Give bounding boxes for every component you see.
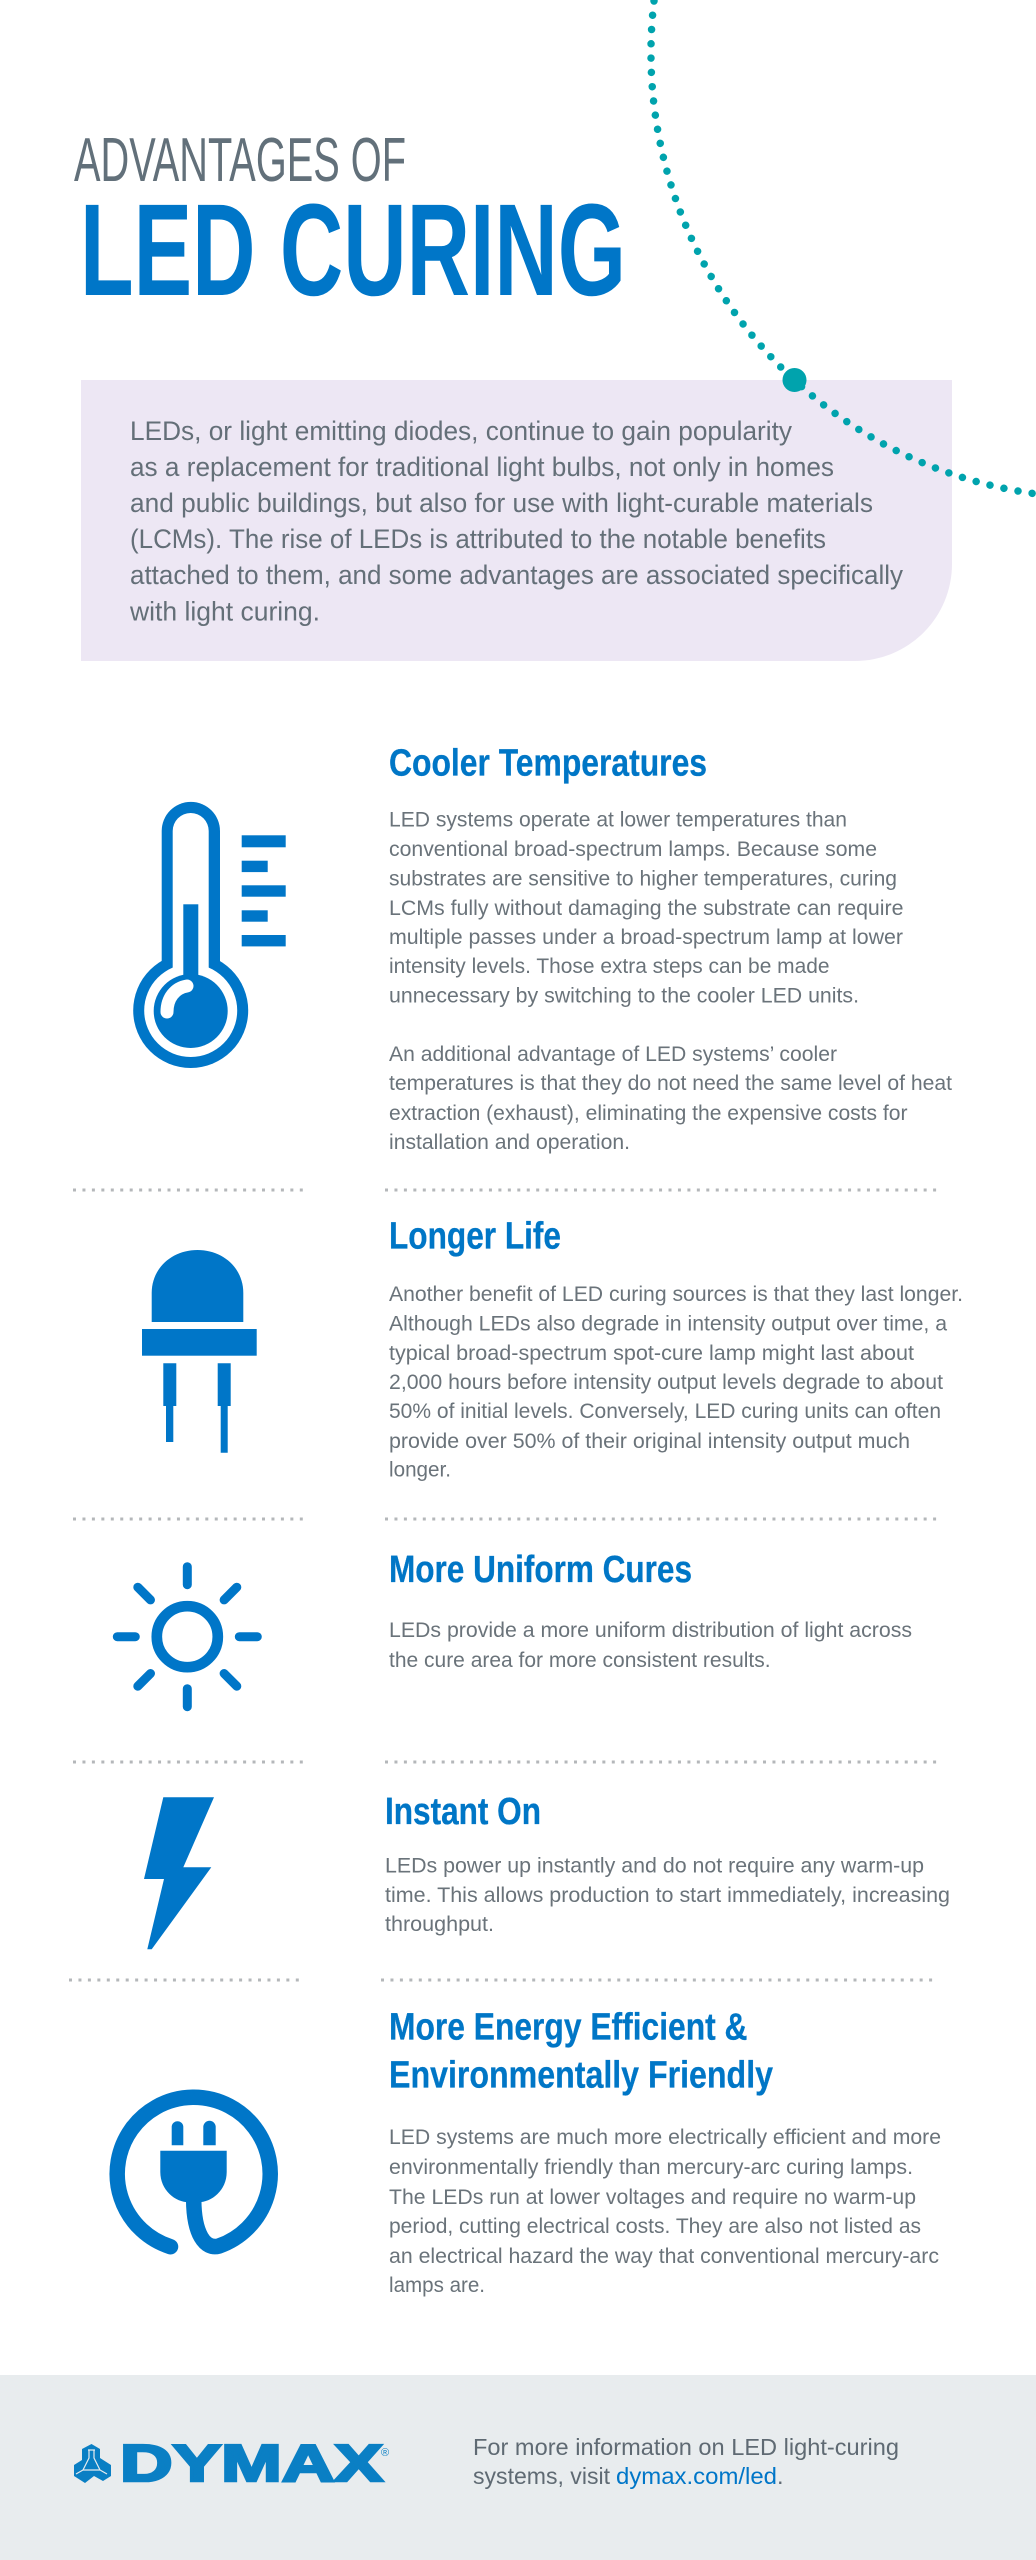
registered mark: ® [381, 2447, 389, 2459]
icon: power plug [117, 2097, 270, 2247]
body: cooler temperatures: extraction (exhaust), eliminating the expensive costs for [389, 1101, 908, 1125]
body: instant on [385, 1854, 950, 1936]
intro text: and public buildings, but also for use with light-curable materials [130, 488, 873, 518]
body: cooler temperatures: conventional broad-spectrum lamps. Because some [389, 837, 877, 861]
body: energy efficient: The LEDs run at lower voltages and require no warm-up [389, 2185, 916, 2209]
icon: lightning bolt [144, 1797, 214, 1949]
body: longer life: typical broad-spectrum spot-cure lamp might last about [389, 1341, 914, 1365]
body: cooler temperatures: LCMs fully without damaging the substrate can require [389, 896, 904, 920]
intro text: LEDs, or light emitting diodes, continue to gain popularity [130, 416, 793, 446]
heading: longer life: Longer Life [389, 1216, 561, 1258]
title line: advantages of: ADVANTAGES OF [74, 125, 406, 195]
heading: instant on: Instant On [385, 1791, 541, 1833]
title [74, 125, 626, 323]
body: longer life: provide over 50% of their original intensity output much [389, 1429, 910, 1453]
body: instant on: throughput. [385, 1912, 494, 1936]
body: cooler temperatures: unnecessary by switching to the cooler LED units. [389, 984, 859, 1008]
body: cooler temperatures: An additional advantage of LED systems’ cooler [389, 1042, 837, 1066]
footer text [473, 2434, 899, 2489]
section: energy efficient [389, 2006, 941, 2297]
wordmark: dymax: DYMAX [120, 2435, 383, 2493]
body: more uniform cures: LEDs provide a more uniform distribution of light across [389, 1618, 912, 1642]
footer band [0, 2375, 1036, 2560]
body: longer life: 2,000 hours before intensity output levels degrade to about [389, 1370, 943, 1394]
intro text: as a replacement for traditional light bulbs, not only in homes [130, 452, 834, 482]
body: energy efficient [389, 2125, 941, 2297]
body: longer life: Although LEDs also degrade in intensity output over time, a [389, 1312, 947, 1336]
body: cooler temperatures: LED systems operate at lower temperatures than [389, 808, 847, 832]
icon: led diode [142, 1250, 257, 1453]
footer text: dymax.com/led [616, 2463, 777, 2489]
body: cooler temperatures: multiple passes under a broad-spectrum lamp at lower [389, 925, 903, 949]
heading: more uniform cures: More Uniform Cures [389, 1549, 692, 1591]
body: cooler temperatures: intensity levels. Those extra steps can be made [389, 954, 830, 978]
heading: energy efficient: Environmentally Friendly [389, 2054, 773, 2096]
body: cooler temperatures: installation and operation. [389, 1130, 630, 1154]
body: longer life: 50% of initial levels. Conversely, LED curing units can often [389, 1399, 941, 1423]
body: cooler temperatures: temperatures is that they do not need the same level of heat [389, 1071, 952, 1095]
body: cooler temperatures: substrates are sensitive to higher temperatures, curing [389, 866, 897, 890]
body: instant on: LEDs power up instantly and do not require any warm-up [385, 1854, 924, 1878]
section: instant on [385, 1791, 950, 1936]
dotted arc with node [651, 1, 1036, 495]
section: longer life [389, 1216, 963, 1482]
title line: led curing: LED CURING [80, 176, 626, 323]
heading: energy efficient: More Energy Efficient & [389, 2006, 748, 2048]
footer text: For more information on LED light-curing [473, 2434, 899, 2460]
intro text: attached to them, and some advantages are associated specifically [130, 560, 904, 590]
intro text: with light curing. [129, 596, 320, 626]
intro text: (LCMs). The rise of LEDs is attributed to the notable benefits [130, 524, 826, 554]
body: longer life: Another benefit of LED curing sources is that they last longer. [389, 1282, 963, 1306]
footer text: . [777, 2463, 784, 2489]
icon: sun [117, 1567, 257, 1707]
body: energy efficient: LED systems are much more electrically efficient and more [389, 2125, 941, 2149]
body: energy efficient: lamps are. [389, 2273, 485, 2297]
body: energy efficient: environmentally friendly than mercury-arc curing lamps. [389, 2155, 913, 2179]
body: energy efficient: period, cutting electrical costs. They are also not listed as [389, 2214, 921, 2238]
icon: thermometer [133, 802, 286, 1068]
section: cooler temperatures [389, 742, 952, 1154]
heading: cooler temperatures: Cooler Temperatures [389, 742, 707, 784]
body: longer life [389, 1282, 963, 1482]
icon: dymax emblem [74, 2444, 111, 2483]
body: cooler temperatures [389, 808, 952, 1154]
body: longer life: longer. [389, 1458, 451, 1482]
panel: introduction [81, 380, 952, 661]
heading: energy efficient [389, 2006, 773, 2096]
intro text [129, 416, 904, 626]
body: energy efficient: an electrical hazard the way that conventional mercury-arc [389, 2244, 939, 2268]
logo: dymax [74, 2435, 389, 2493]
body: instant on: time. This allows production to start immediately, increasing [385, 1883, 950, 1907]
section: more uniform cures [389, 1549, 912, 1672]
body: more uniform cures [389, 1618, 912, 1672]
footer text: systems, visit [473, 2463, 610, 2489]
body: more uniform cures: the cure area for more consistent results. [389, 1648, 771, 1672]
